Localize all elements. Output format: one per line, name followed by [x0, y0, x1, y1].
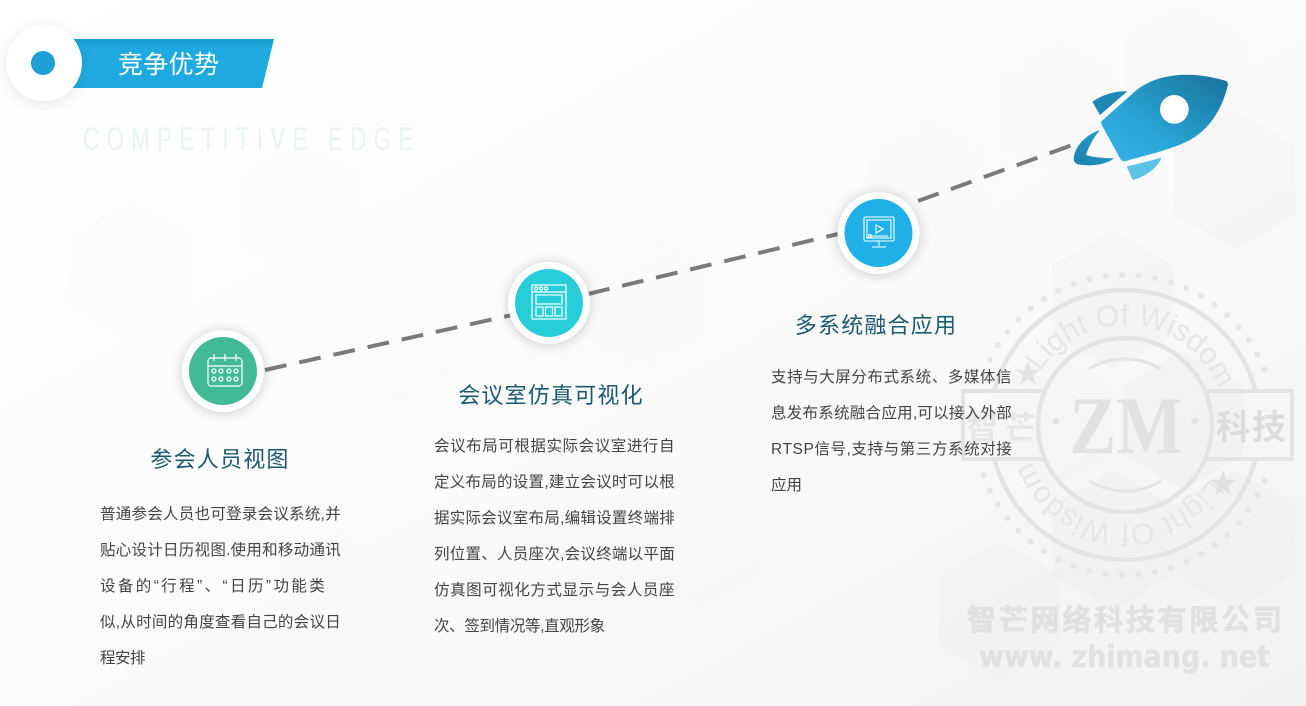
watermark seal: Light Of Wisdom [1025, 304, 1231, 387]
header: section title badge [4, 36, 274, 106]
watermark seal: 智芒 [966, 410, 1036, 446]
text: column 1: 似,从时间的角度查看自己的会议日 [100, 614, 341, 631]
text: column 2: 会议布局可根据实际会议室进行自 [434, 438, 675, 455]
watermark seal: ★ [1014, 358, 1042, 389]
text: column 2: 定义布局的设置,建立会议时可以根 [434, 474, 675, 491]
watermark seal: ZM [1070, 380, 1182, 471]
text: column 3: 支持与大屏分布式系统、多媒体信 [771, 369, 1012, 386]
heading: column 1: 参会人员视图 [150, 447, 290, 472]
text: column 2 [434, 438, 675, 635]
text: column 3 [771, 368, 1012, 494]
text: column 1: 程安排 [100, 650, 145, 667]
heading: column 2: 会议室仿真可视化 [458, 383, 644, 408]
watermark seal: Light Of Wisdom [1019, 463, 1225, 546]
subtitle: COMPETITIVE EDGE [83, 121, 413, 157]
node 1: calendar icon [176, 326, 270, 418]
text: column 2: 次、签到情况等,直观形象 [434, 618, 605, 635]
text: column 3: RTSP信号,支持与第三方系统对接 [771, 441, 1012, 458]
text: column 1 [100, 506, 341, 667]
node 2: layout window icon [502, 258, 596, 350]
watermark seal: www. zhimang. net [979, 640, 1270, 675]
icon: rocket [1074, 74, 1228, 180]
text: column 1: 贴心设计日历视图.使用和移动通讯 [100, 542, 341, 559]
text: column 1: 设备的“行程”、“日历”功能类 [100, 578, 327, 595]
header: section title badge: 竞争优势 [118, 51, 219, 79]
node 3: video monitor icon [832, 188, 925, 280]
text: column 1: 普通参会人员也可登录会议系统,并 [100, 506, 341, 523]
text: column 2: 仿真图可视化方式显示与会人员座 [434, 582, 675, 599]
watermark seal: 科技 [1216, 409, 1286, 447]
watermark seal: ★ [1209, 468, 1237, 499]
heading: column 3: 多系统融合应用 [795, 313, 957, 338]
text: column 3: 息发布系统融合应用,可以接入外部 [771, 405, 1012, 422]
text: column 2: 据实际会议室布局,编辑设置终端排 [434, 510, 675, 527]
text: column 3: 应用 [771, 477, 802, 494]
watermark seal: 智芒网络科技有限公司 [967, 604, 1282, 637]
text: column 2: 列位置、人员座次,会议终端以平面 [434, 546, 675, 563]
